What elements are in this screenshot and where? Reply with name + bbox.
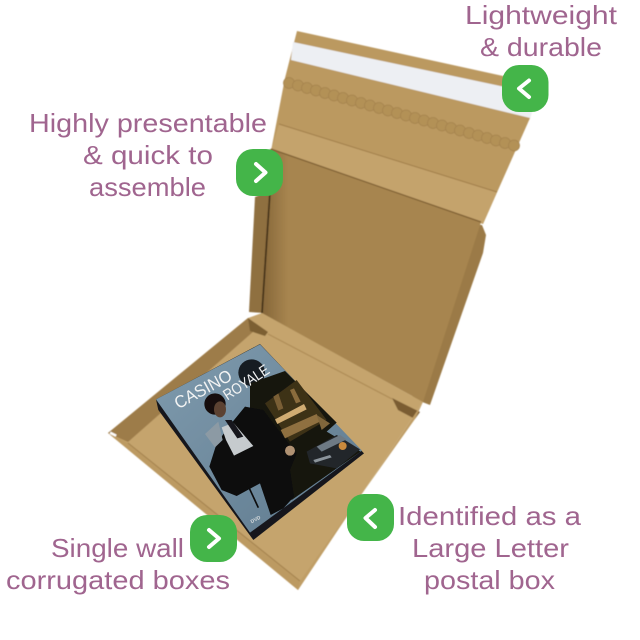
rear left corner tab	[248, 318, 268, 336]
box base floor	[108, 313, 423, 590]
head	[204, 393, 226, 415]
case edge	[156, 344, 364, 540]
title text: CASINO	[171, 365, 235, 413]
callout text: Highly presentable	[29, 108, 267, 138]
lid right side flap	[412, 224, 486, 405]
floor crease	[268, 334, 392, 399]
lid crease shadow	[262, 192, 270, 313]
callout text: Large Letter	[412, 533, 569, 563]
callout: lightweight and durable	[465, 0, 618, 112]
icon: green left chevron	[502, 65, 548, 112]
callout text: corrugated boxes	[6, 565, 230, 595]
box: opened cardboard mailer	[108, 31, 540, 590]
front left lip	[108, 433, 300, 590]
callout text	[29, 108, 267, 202]
gun	[249, 488, 258, 508]
cover background	[156, 344, 362, 533]
white raw edge	[110, 433, 116, 436]
box lid top flap	[271, 31, 540, 224]
lid left side flap	[249, 190, 272, 313]
man in suit	[204, 393, 297, 515]
car	[307, 435, 360, 468]
front right lip	[298, 402, 423, 590]
right corner tab	[392, 398, 420, 419]
callout text: Single wall	[51, 533, 184, 563]
callout: single wall corrugated	[6, 515, 237, 595]
callout text: & durable	[480, 32, 602, 62]
callout: large letter postal box	[347, 494, 582, 595]
dark scene behind	[238, 359, 361, 500]
casino building lights	[265, 380, 330, 442]
icon: green left chevron	[347, 494, 394, 541]
shirt	[222, 423, 253, 456]
rear left wall	[108, 318, 254, 442]
bow tie	[225, 420, 243, 438]
callout text	[465, 0, 618, 62]
white adhesive strip	[291, 42, 538, 118]
icon: green right chevron	[236, 149, 283, 196]
DVD case: Casino Royale	[156, 344, 364, 540]
age rating badge	[339, 442, 347, 450]
callout text: & quick to	[83, 140, 213, 170]
callout text	[398, 501, 582, 595]
icon: green right chevron	[190, 515, 237, 562]
lighter fold band	[271, 124, 497, 224]
scarf	[205, 422, 223, 447]
hand	[285, 446, 295, 456]
lid main panel	[261, 149, 481, 402]
scalloped tear strip	[284, 78, 520, 151]
callout text: Identified as a	[398, 501, 582, 531]
callout text	[6, 533, 230, 595]
DVD mark: DVD	[250, 515, 262, 525]
callout text: Lightweight	[465, 0, 618, 30]
DVD case: Casino Royale: ROYALE	[220, 362, 273, 404]
callout text: assemble	[89, 172, 206, 202]
callout: highly presentable	[29, 108, 283, 202]
callout text: postal box	[424, 565, 555, 595]
